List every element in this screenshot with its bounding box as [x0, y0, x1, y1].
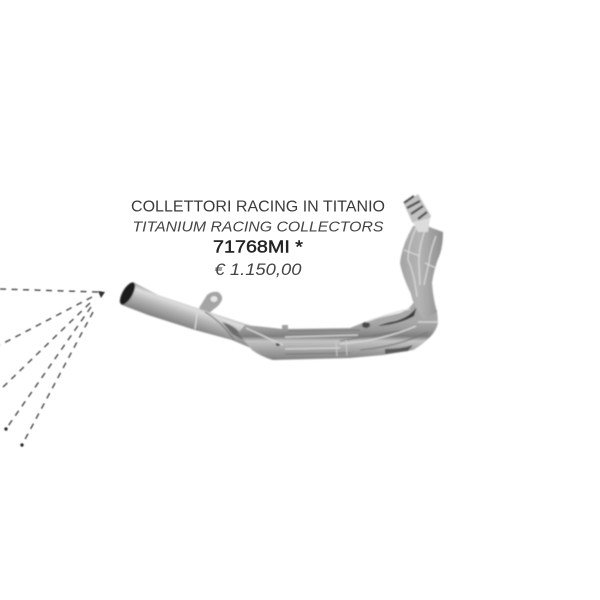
product code: 71768MI *	[213, 236, 303, 256]
inlet pipe	[122, 282, 258, 351]
dark gap between pipes	[378, 306, 417, 326]
subtitle: English: TITANIUM RACING COLLECTORS	[132, 220, 384, 236]
pipe highlights	[195, 308, 438, 349]
exhaust collector pipes	[117, 194, 443, 360]
title: Italian: COLLETTORI RACING IN TITANIO	[131, 198, 385, 216]
dashed leader lines	[0, 289, 105, 447]
flange	[404, 194, 431, 232]
riser pipes	[400, 225, 443, 320]
mounting bracket	[199, 292, 222, 316]
pipe opening	[117, 280, 138, 307]
text block: product label	[131, 198, 385, 279]
joint shading on inlet	[222, 322, 243, 340]
main collector bundle	[238, 303, 438, 360]
price: € 1.150,00	[214, 261, 302, 279]
small tab	[282, 325, 288, 331]
